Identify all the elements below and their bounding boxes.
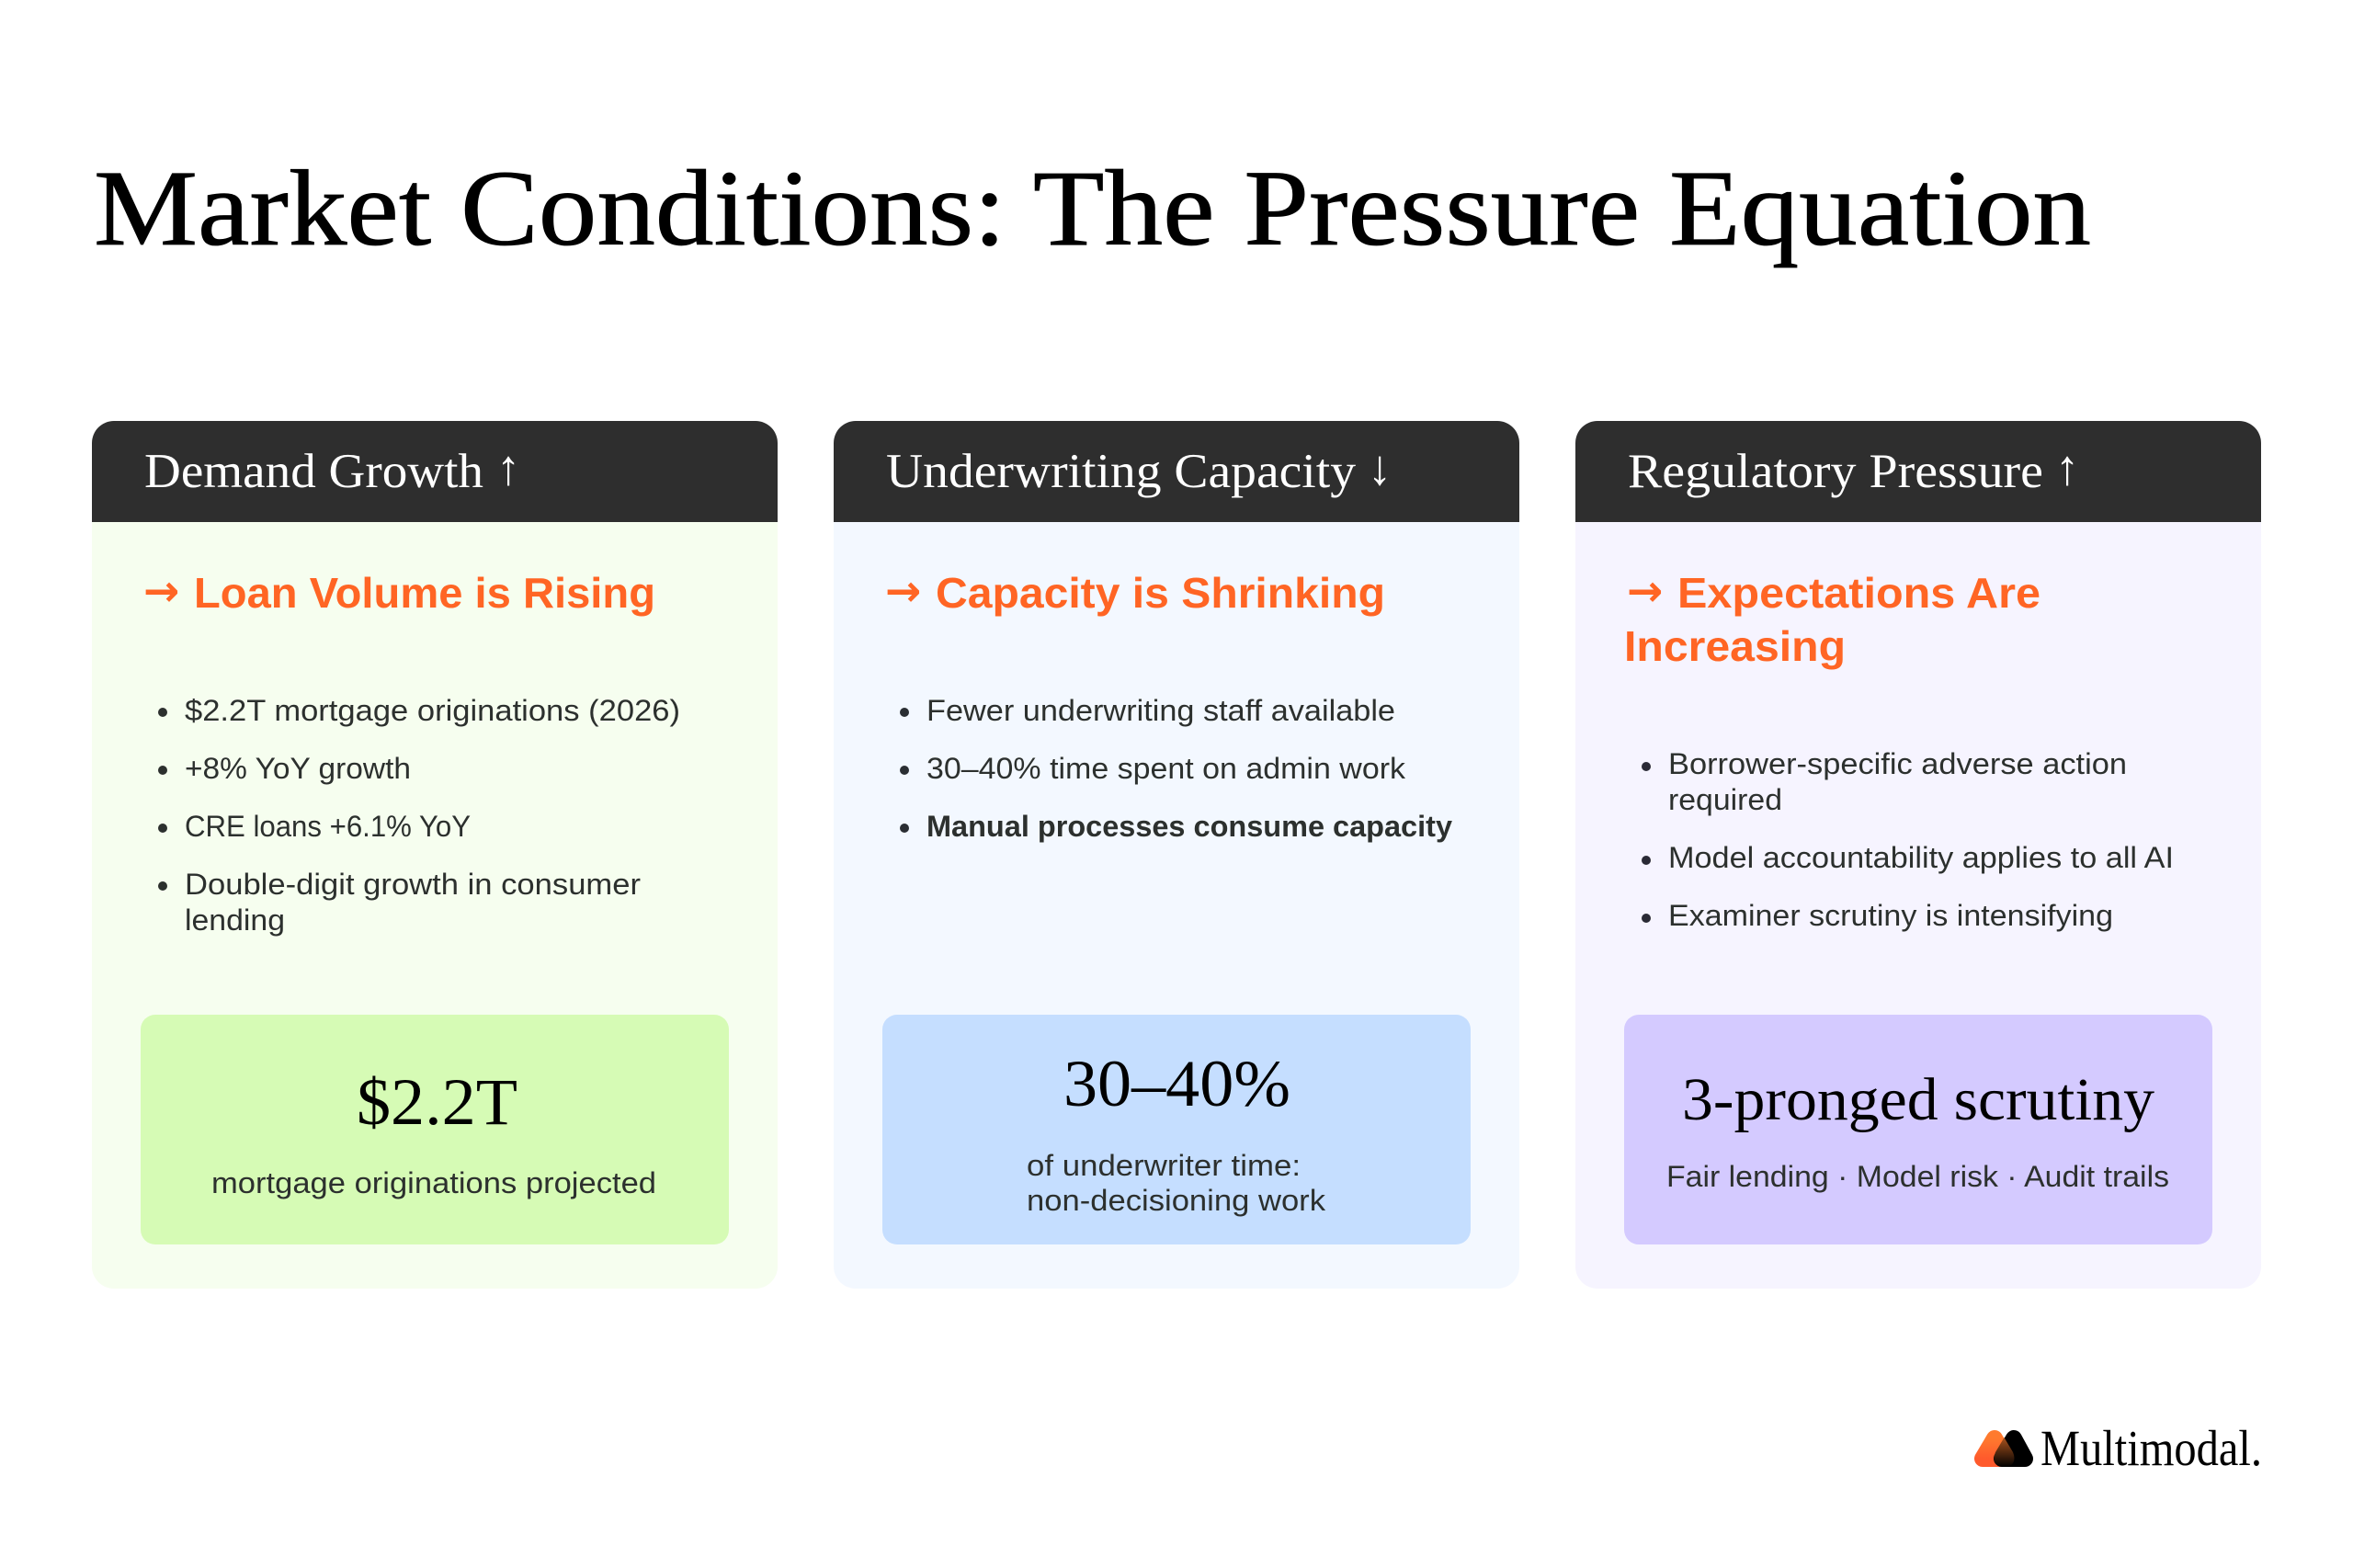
bullet list: required — [1668, 783, 1782, 816]
subheading — [1624, 569, 2040, 670]
logo: Multimodal — [1983, 1420, 2262, 1476]
panel: regulatory pressure — [1575, 421, 2261, 1289]
icon: up arrow: ↑ — [496, 440, 520, 495]
bullet list: Model accountability applies to all AI — [1668, 841, 2174, 874]
icon: up arrow: ↑ — [2055, 440, 2079, 495]
header title: Underwriting Capacity — [886, 445, 1357, 498]
bullet list: 30–40% time spent on admin work — [926, 752, 1406, 785]
header title: Demand Growth — [144, 445, 483, 498]
icon: logo mark — [1983, 1437, 2025, 1467]
panel header bar — [834, 421, 1519, 522]
bullet list: lending — [185, 903, 285, 937]
panel background — [92, 421, 778, 1289]
panel: underwriting capacity — [834, 421, 1519, 1289]
bullet list: +8% YoY growth — [185, 752, 411, 785]
stat callout: of underwriter time: — [1027, 1149, 1301, 1182]
arrow bullet: → — [885, 566, 921, 617]
stat callout: non-decisioning work — [1027, 1184, 1326, 1217]
bullet list: Double-digit growth in consumer — [185, 868, 641, 901]
arrow bullet: → — [1627, 566, 1663, 617]
icon: down arrow: ↓ — [1368, 440, 1392, 495]
bullet list — [900, 694, 1452, 843]
bullet list: CRE loans +6.1% YoY — [185, 810, 471, 843]
stat callout: 3-pronged scrutiny — [1682, 1066, 2154, 1133]
stat callout — [882, 1015, 1471, 1244]
bullet list — [1642, 747, 2174, 932]
bullet list: Manual processes consume capacity — [926, 810, 1452, 843]
stat callout: 30–40% — [1063, 1047, 1290, 1120]
subheading: Capacity is Shrinking — [936, 569, 1385, 617]
stat callout — [141, 1015, 729, 1244]
bullet list — [158, 694, 680, 937]
panel header bar — [1575, 421, 2261, 522]
arrow bullet: → — [143, 566, 179, 617]
subheading: Expectations Are — [1677, 569, 2040, 617]
stat callout: mortgage originations projected — [211, 1166, 656, 1199]
bullet list: Examiner scrutiny is intensifying — [1668, 899, 2113, 932]
header title: Regulatory Pressure — [1628, 445, 2043, 498]
stat callout: $2.2T — [357, 1065, 517, 1139]
panel background — [1575, 421, 2261, 1289]
panel header bar — [92, 421, 778, 522]
stat callout — [1624, 1015, 2212, 1244]
bullet list: $2.2T mortgage originations (2026) — [185, 694, 680, 727]
bullet list: Borrower-specific adverse action — [1668, 747, 2127, 780]
subheading: Increasing — [1624, 622, 1846, 670]
panel: demand growth — [92, 421, 778, 1289]
title: Market Conditions: The Pressure Equation — [94, 148, 2091, 268]
subheading: Loan Volume is Rising — [194, 569, 655, 617]
bullet list: Fewer underwriting staff available — [926, 694, 1395, 727]
stat callout: Fair lending · Model risk · Audit trails — [1666, 1160, 2169, 1193]
wordmark: Multimodal. — [2040, 1420, 2262, 1476]
panel background — [834, 421, 1519, 1289]
